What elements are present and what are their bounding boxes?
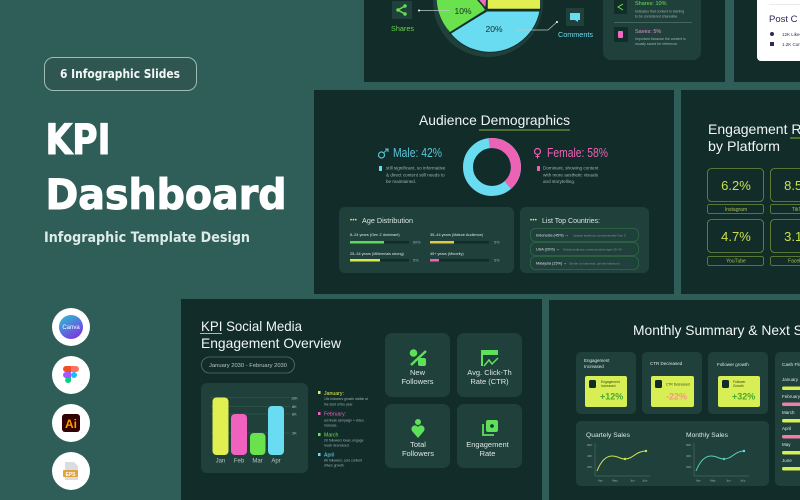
monthly legend: 8K followers, core content <box>324 458 362 462</box>
icon: Canva <box>52 308 90 346</box>
female stat: Dominant, showing content <box>543 166 599 170</box>
panel: age distribution: 25–34 years (Millennials strong) <box>350 252 405 256</box>
female stat <box>534 145 608 184</box>
line chart: monthly sales: Apr <box>696 478 701 482</box>
panel: age distribution: ••• <box>350 218 357 224</box>
card: CTR decreased <box>642 352 702 414</box>
card: engagement rate: Rate <box>480 449 495 458</box>
date pill <box>202 357 294 373</box>
panel: age distribution <box>339 207 514 273</box>
heading <box>200 318 342 351</box>
panel: engagement rate by platform: YouTube <box>726 258 746 264</box>
panel: KPI social media engagement overview <box>181 299 542 500</box>
line chart: quarterly sales: 40K <box>587 454 592 458</box>
card: sales line charts: Quartely Sales <box>586 432 631 439</box>
bar chart: 6K <box>292 412 297 416</box>
shares label and icon <box>391 1 450 33</box>
panel: age distribution: 60% <box>413 240 421 244</box>
panel: top countries: USA (20%) → <box>536 248 560 252</box>
heading: Engagement Overview <box>201 335 342 351</box>
comments label and icon <box>516 8 593 39</box>
card: sales line charts <box>576 421 769 486</box>
panel: top countries: ••• <box>530 218 537 224</box>
title: KPI Dashboard: KPI <box>46 115 110 164</box>
heading: Audience Demographics <box>419 112 570 128</box>
panel: age distribution: 35–44 years (Mature Audience) <box>430 233 484 237</box>
icon: Illustrator: Ai <box>65 417 77 431</box>
card: cash flow: February <box>782 394 800 399</box>
card: total followers <box>385 404 450 468</box>
shares label and icon: Shares <box>391 24 414 33</box>
bar chart: Jan <box>216 458 225 464</box>
heading: by Platform <box>708 138 780 154</box>
heading <box>708 121 800 154</box>
line chart: monthly sales: Jun <box>726 478 731 482</box>
card: follower growth: Follower <box>733 380 746 384</box>
monthly legend: March <box>324 432 339 438</box>
male stat: & direct content still needs to <box>386 172 445 178</box>
line chart: monthly sales: 40K <box>686 454 691 458</box>
panel: monthly summary and next steps <box>549 300 800 500</box>
bar chart: 8K <box>292 405 297 409</box>
card: total followers: Followers <box>402 449 434 458</box>
line chart: quarterly sales: Jun <box>630 478 635 482</box>
card: average click-through rate <box>457 333 522 397</box>
card: engagement increased: +12% <box>600 392 623 402</box>
card: engagement increased: Increased <box>601 384 616 388</box>
card: CTR decreased: CTR Decreased <box>650 361 683 366</box>
comments label and icon: Comments <box>558 30 593 39</box>
panel: engagement share pie slide <box>364 0 725 82</box>
female stat: Female: 58% <box>547 145 608 160</box>
card: follower growth: Follower growth <box>717 362 749 367</box>
card: follower growth <box>708 352 768 414</box>
card: new followers: New <box>410 368 426 377</box>
date pill: January 2030 - February 2030 <box>209 363 287 369</box>
panel: age distribution: 5% <box>494 258 500 262</box>
panel: age distribution: 5% <box>494 240 500 244</box>
card: CTR decreased: -22% <box>666 392 687 402</box>
panel: age distribution: 8–24 years (Gen Z dominant) <box>350 233 400 237</box>
monthly legend: February: <box>324 412 346 418</box>
line chart: monthly sales: May <box>710 478 716 482</box>
title: KPI Dashboard <box>46 115 286 219</box>
icon: EPS file <box>52 452 90 490</box>
line chart: quarterly sales: May <box>612 478 618 482</box>
card: follower growth: Growth <box>733 384 744 388</box>
metric tiles <box>708 168 800 266</box>
line chart: quarterly sales: Apr <box>598 478 603 482</box>
monthly legend: April <box>324 452 334 458</box>
bar chart: 10K <box>291 396 298 400</box>
card: cash flow: April <box>782 426 791 431</box>
white post card <box>757 0 800 61</box>
badge: 6 Infographic Slides <box>44 58 196 90</box>
monthly legend: 10k followers growth visible at <box>324 397 368 401</box>
monthly legend: drives growth. <box>324 464 345 468</box>
monthly legend: increase. <box>324 424 337 428</box>
monthly legend: reach decreased. <box>324 444 350 448</box>
side card: shares and saves: Indicates that content is starting <box>635 10 684 14</box>
card: cash flow: May <box>782 442 791 447</box>
line chart: quarterly sales: 20K <box>587 465 592 469</box>
side card: shares and saves: usually saved for reference. <box>635 42 678 46</box>
pie chart: 10% <box>454 6 472 16</box>
male stat: Male: 42% <box>393 145 442 160</box>
card: engagement increased: Engagement <box>601 380 620 384</box>
panel: audience demographics <box>314 90 674 294</box>
bar chart <box>201 383 308 473</box>
icon: EPS file: EPS <box>65 472 76 478</box>
panel: engagement rate by platform <box>681 90 800 294</box>
male stat <box>378 145 446 184</box>
panel: engagement rate by platform: 6.2% <box>721 178 751 193</box>
side card: shares and saves: to be considered shareable. <box>635 14 678 18</box>
white post card: Post C <box>769 14 798 25</box>
card: engagement increased <box>576 352 636 414</box>
line chart: quarterly sales: July <box>642 478 648 482</box>
male stat: be maintained. <box>386 179 416 184</box>
panel: top countries: List Top Countries: <box>542 218 600 225</box>
card: engagement rate: Engagement <box>466 440 510 449</box>
pie chart: 20% <box>485 24 503 34</box>
card: cash flow: January <box>782 377 799 382</box>
bar chart: Mar <box>252 458 263 464</box>
line chart: quarterly sales <box>587 443 650 482</box>
panel: age distribution: 45+ years (Minority) <box>430 252 464 256</box>
female stat: with more aesthetic visuals <box>543 172 599 178</box>
card: cash flow: June <box>782 458 792 463</box>
line chart: monthly sales: 60K <box>686 443 691 447</box>
card: average click-through rate: Rate (CTR) <box>470 377 509 386</box>
side card: shares and saves: Important because the content is <box>635 37 686 41</box>
pie chart <box>433 0 543 57</box>
panel: top countries: Similar to Indonesia, gender balanced <box>569 262 620 266</box>
panel: top countries: Global audience, predominantly ages 25–34 <box>563 248 622 252</box>
female stat: and storytelling. <box>543 179 575 184</box>
card: new followers <box>385 333 450 397</box>
panel: top countries <box>520 207 649 273</box>
panel: posts slide <box>734 0 800 82</box>
card: follower growth: +32% <box>732 392 755 402</box>
panel: engagement rate by platform: 4.7% <box>721 229 751 244</box>
donut chart <box>468 143 516 191</box>
card: average click-through rate: Avg. Click-Th <box>467 368 512 377</box>
side card: shares and saves <box>603 0 701 60</box>
line chart: monthly sales: July <box>740 478 746 482</box>
line chart: quarterly sales: 60K <box>587 443 592 447</box>
panel: top countries: Malaysia (15%) → <box>536 262 567 266</box>
card: cash flow <box>775 352 800 486</box>
card: engagement increased: Engagement <box>584 358 610 363</box>
card: engagement increased: Increased <box>584 364 604 369</box>
panel: age distribution: 5% <box>413 258 419 262</box>
bar chart: 2K <box>292 432 297 436</box>
monthly legend <box>318 391 368 468</box>
card: cash flow: March <box>782 410 795 415</box>
panel: age distribution: Age Distribution <box>362 218 413 225</box>
side card: shares and saves: Saves: 5% <box>635 29 661 35</box>
panel: top countries: Largest audience, predominantly Gen Z <box>573 234 626 238</box>
card: new followers: Followers <box>401 377 434 386</box>
card: CTR decreased: CTR Decreased <box>666 382 690 386</box>
monthly legend: ad break campaign + video <box>324 418 364 422</box>
monthly legend: January: <box>324 391 344 397</box>
icon: Canva: Canva <box>62 325 80 331</box>
side card: shares and saves: Shares: 10% <box>635 1 667 7</box>
title: KPI Dashboard: Dashboard <box>46 170 286 219</box>
line chart: monthly sales: 20K <box>686 465 691 469</box>
icon: Illustrator <box>52 404 90 442</box>
line chart: monthly sales <box>686 443 749 482</box>
monthly legend: the start of the year. <box>324 402 353 406</box>
panel: top countries: Indonesia (45%) → <box>536 234 569 238</box>
card: engagement rate <box>457 404 522 468</box>
bar chart: Apr <box>271 458 281 464</box>
heading: KPI Social Media <box>201 318 302 334</box>
card: total followers: Total <box>410 440 426 449</box>
monthly legend: 2K followers lower, engage <box>324 438 364 442</box>
icon: Figma <box>52 356 90 394</box>
panel: engagement rate by platform: Instagram <box>725 207 747 213</box>
card: sales line charts: Monthly Sales <box>686 432 729 439</box>
badge: 6 Infographic Slides: 6 Infographic Slides <box>60 66 180 81</box>
bar chart: Feb <box>234 458 245 464</box>
subtitle: Infographic Template Design <box>44 230 250 246</box>
male stat: still significant, so informative <box>386 166 446 170</box>
